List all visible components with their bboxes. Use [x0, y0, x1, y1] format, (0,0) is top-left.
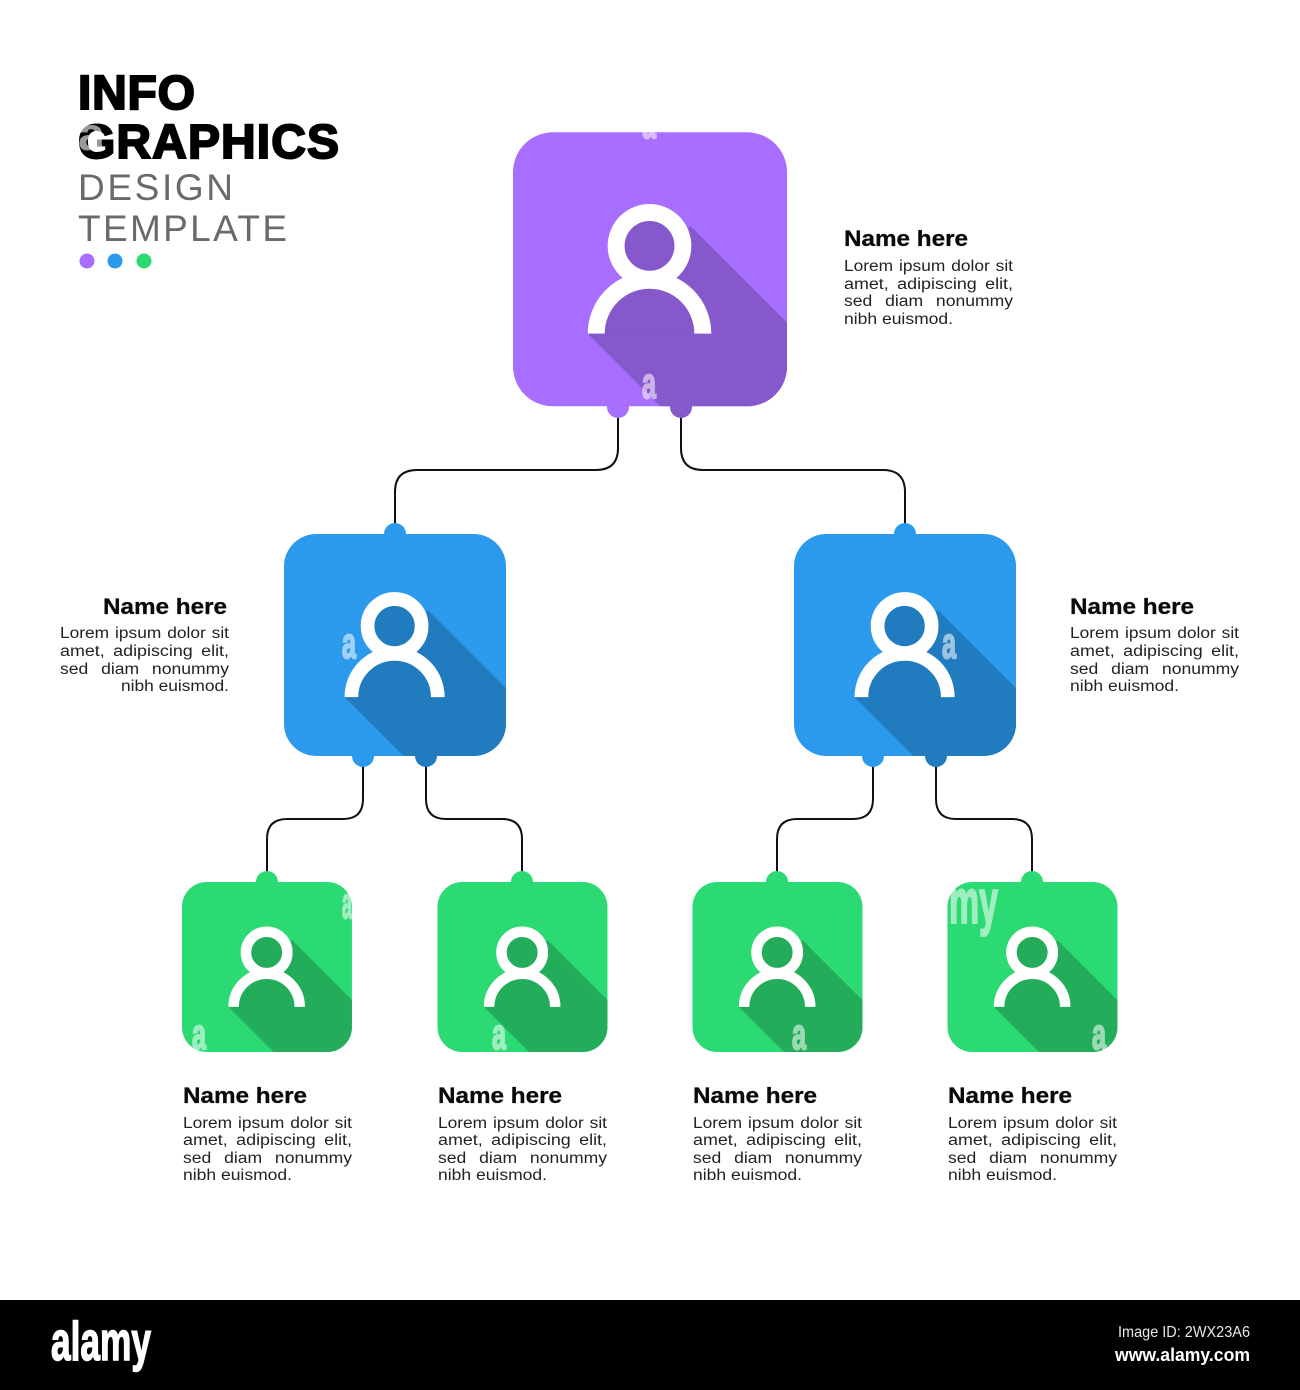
text block: green 4: sed diam nonummy [948, 1150, 1117, 1167]
text block: green 3: Lorem ipsum dolor sit [693, 1115, 863, 1132]
text block: green 2: Lorem ipsum dolor sit [438, 1115, 608, 1132]
watermark letters over cards: a [642, 359, 656, 408]
text block: green 1 [183, 1083, 353, 1184]
text block: root: sed diam nonummy [844, 293, 1013, 310]
text block: root [844, 226, 1014, 328]
watermark letters over cards: a [492, 1010, 506, 1059]
title: DESIGN [78, 167, 233, 208]
watermark letters over cards: a [792, 1010, 806, 1059]
text block: left blue: sed diam nonummy [60, 661, 229, 678]
footer bar: Image ID: 2WX23A6 [1118, 1324, 1250, 1341]
watermark letters over cards: a [342, 619, 356, 668]
text block: green 3: nibh euismod. [693, 1167, 802, 1184]
text block: right blue: amet, adipiscing elit, [1070, 643, 1239, 660]
text block: green 1: sed diam nonummy [183, 1150, 352, 1167]
title: TEMPLATE [78, 208, 287, 249]
node: green card 4 [948, 871, 1121, 1053]
text block: right blue: nibh euismod. [1070, 678, 1179, 695]
text block: root: Lorem ipsum dolor sit [844, 258, 1014, 275]
text block: left blue: nibh euismod. [121, 678, 229, 695]
footer bar: www.alamy.com [1114, 1345, 1250, 1365]
watermark letters over cards: a [942, 619, 956, 668]
watermark letters over cards: a [642, 99, 656, 148]
text block: right blue: sed diam nonummy [1070, 661, 1239, 678]
legend dots [80, 254, 152, 268]
text block: left blue: Lorem ipsum dolor sit [60, 625, 230, 642]
text block: root: nibh euismod. [844, 311, 953, 328]
title: GRAPHICS [78, 116, 339, 169]
watermark letters over cards: a [192, 1010, 206, 1059]
text block: green 4 [948, 1083, 1118, 1184]
watermark letters over cards: a [342, 879, 352, 928]
title [78, 67, 339, 249]
watermark letters over cards: my [949, 868, 998, 937]
footer bar: alamy [51, 1310, 151, 1372]
title: a [78, 108, 105, 160]
text block: left blue: amet, adipiscing elit, [60, 643, 229, 660]
text block: green 3: Name here [693, 1083, 817, 1108]
watermark letters over cards: a [1092, 1010, 1106, 1059]
node: right blue card [794, 523, 1020, 767]
text block: green 1: nibh euismod. [183, 1167, 292, 1184]
text block: green 2: amet, adipiscing elit, [438, 1132, 607, 1149]
footer bar [0, 1300, 1300, 1390]
text block: green 2: nibh euismod. [438, 1167, 547, 1184]
watermark letters over cards [192, 99, 1106, 1059]
text block: green 4: Name here [948, 1083, 1072, 1108]
text block: root: amet, adipiscing elit, [844, 276, 1013, 293]
text block: green 3: amet, adipiscing elit, [693, 1132, 862, 1149]
text block: right blue [1070, 594, 1240, 695]
text block: right blue: Name here [1070, 594, 1194, 619]
text block: green 4: Lorem ipsum dolor sit [948, 1115, 1118, 1132]
text block: left blue [60, 594, 230, 695]
text block: green 1: Name here [183, 1083, 307, 1108]
text block: green 2: Name here [438, 1083, 562, 1108]
text block: green 2 [438, 1083, 608, 1184]
connector lines [267, 415, 1032, 873]
text block: green 2: sed diam nonummy [438, 1150, 607, 1167]
node: green card 1 [182, 871, 355, 1053]
text block: green 3: sed diam nonummy [693, 1150, 862, 1167]
text block: right blue: Lorem ipsum dolor sit [1070, 625, 1240, 642]
node: left blue card [284, 523, 510, 767]
node: green card 3 [692, 871, 866, 1053]
text block: green 4: nibh euismod. [948, 1167, 1057, 1184]
title: INFO [78, 67, 195, 120]
text block: green 1: Lorem ipsum dolor sit [183, 1115, 353, 1132]
text block: left blue: Name here [103, 594, 227, 619]
text block: green 3 [693, 1083, 863, 1184]
node: root purple card [513, 132, 792, 418]
text block: root: Name here [844, 226, 968, 251]
text block: green 1: amet, adipiscing elit, [183, 1132, 352, 1149]
node: green card 2 [438, 871, 611, 1053]
text block: green 4: amet, adipiscing elit, [948, 1132, 1117, 1149]
